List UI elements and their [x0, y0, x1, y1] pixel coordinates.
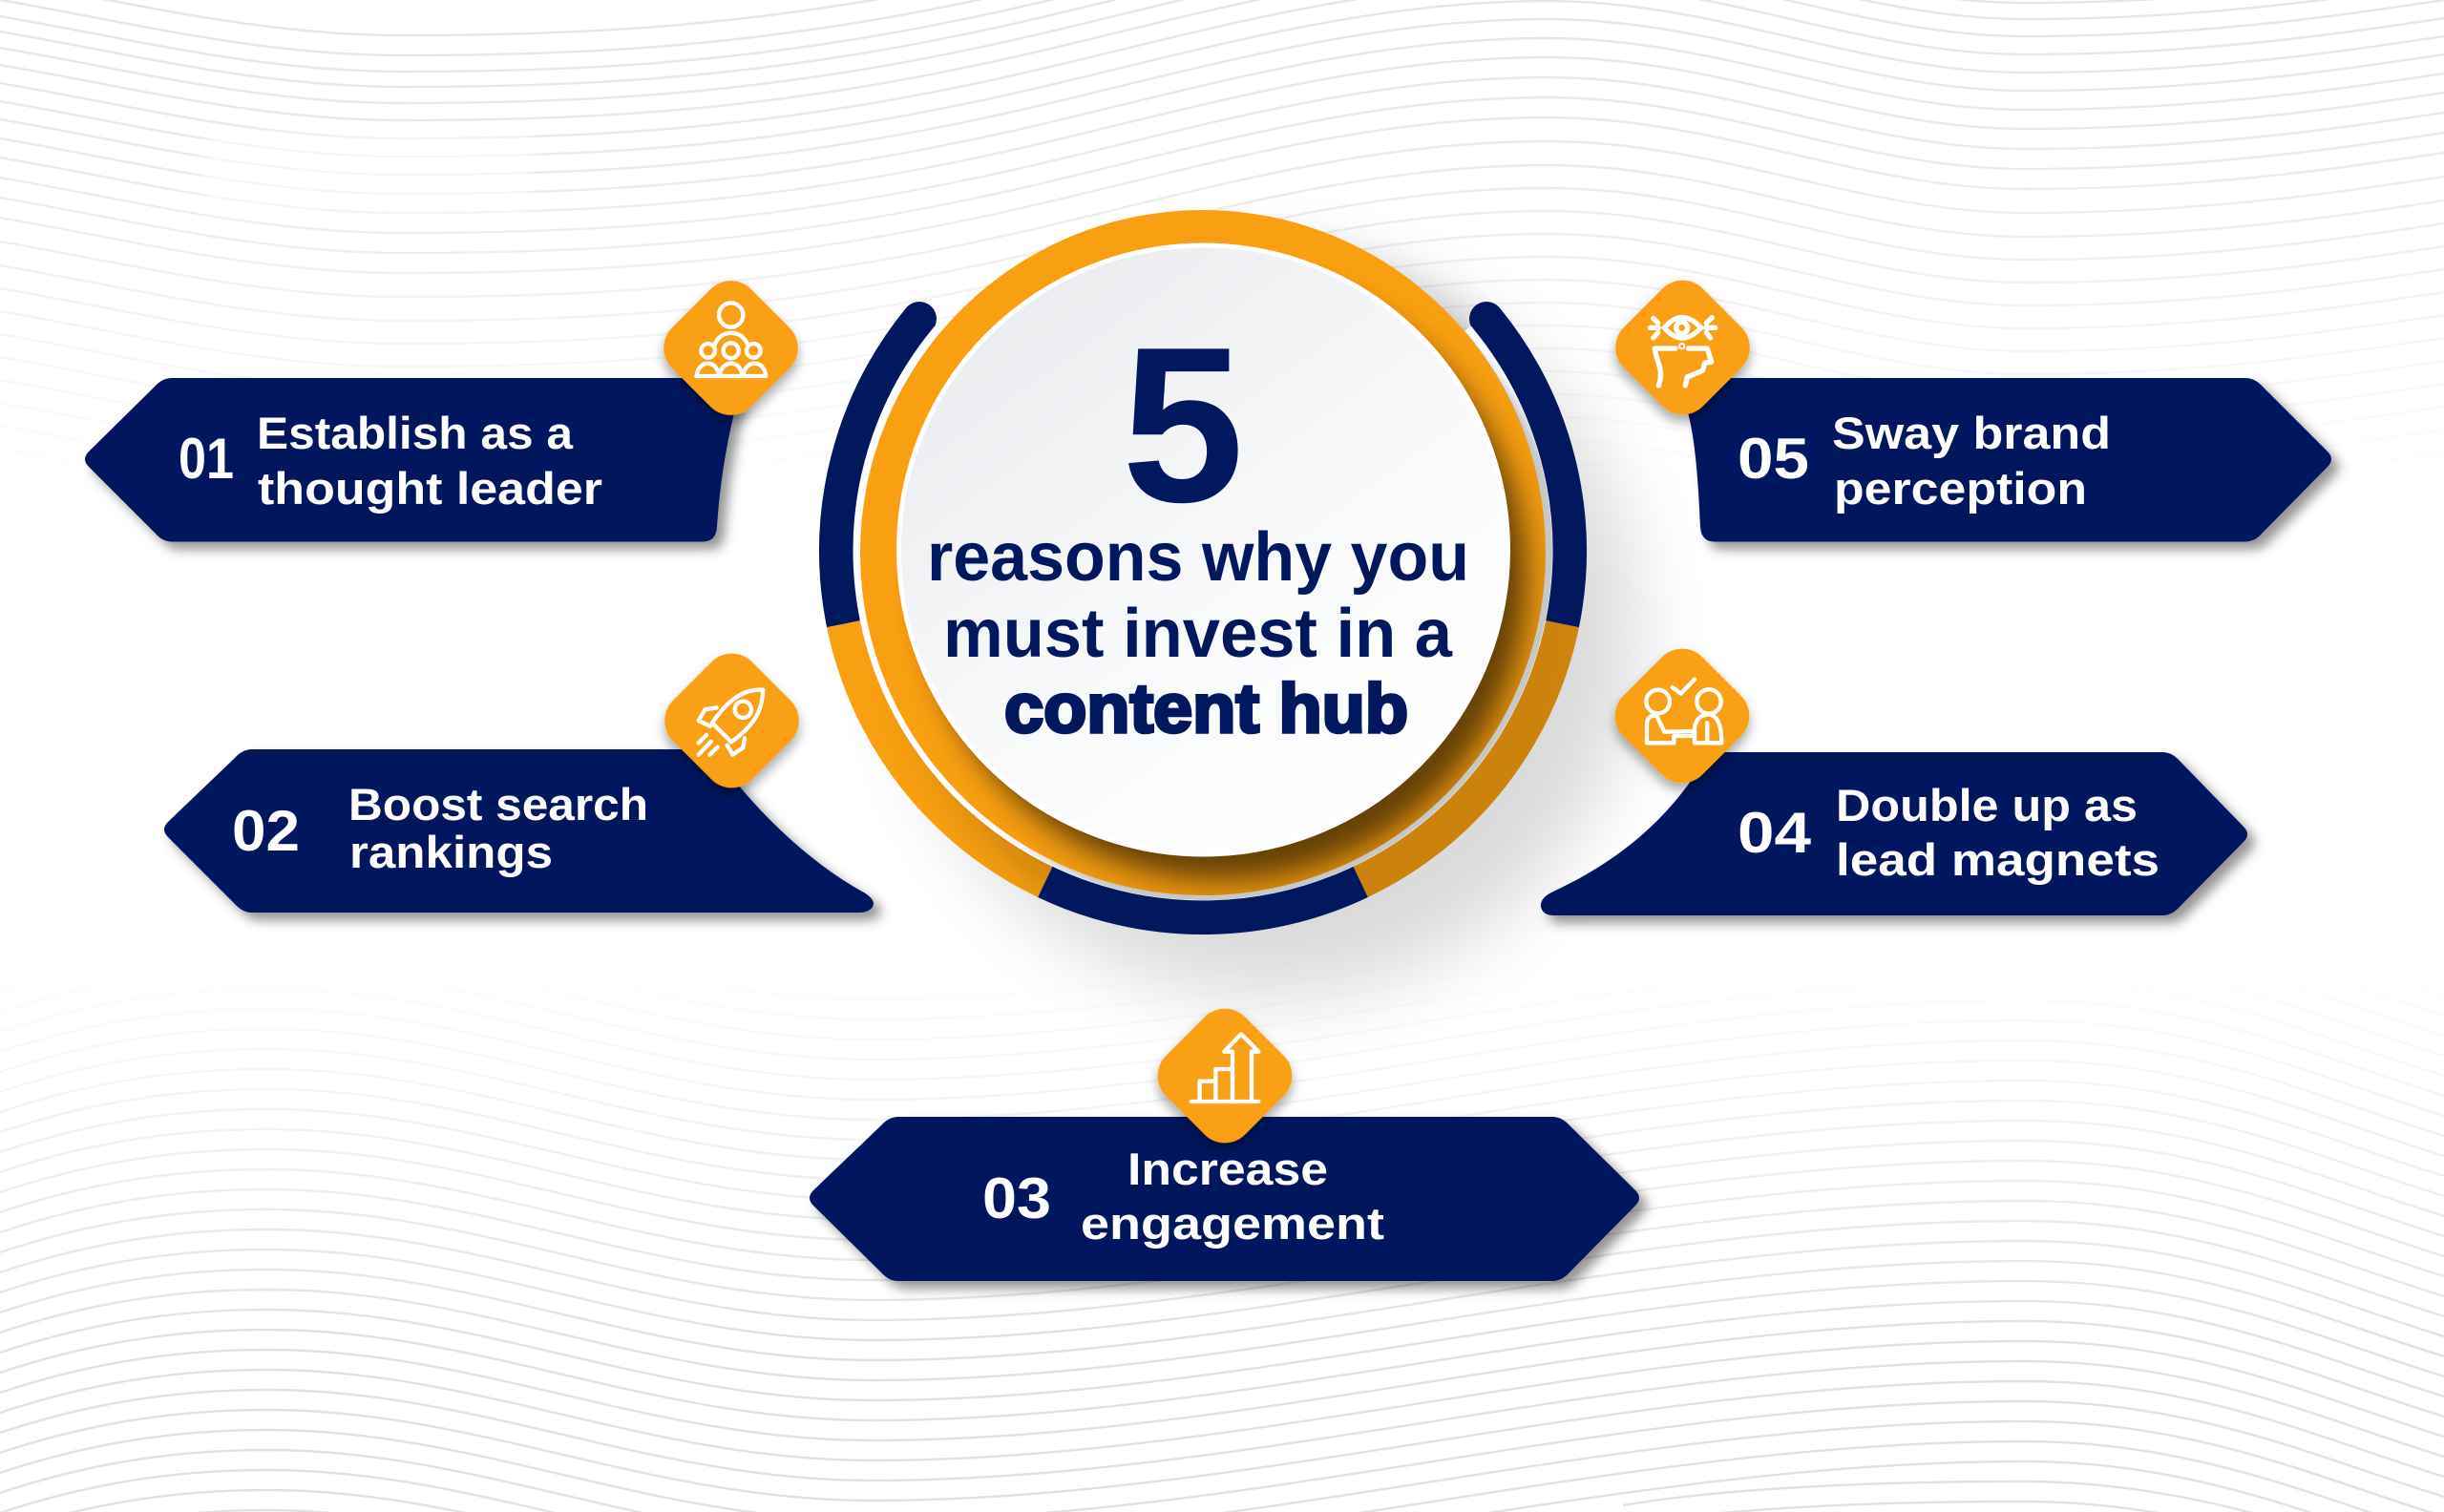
icon: growth chart badge	[1146, 997, 1304, 1155]
orange ring	[860, 210, 1546, 895]
banner 01: thought leader	[258, 463, 602, 514]
banner 04: lead magnets	[1836, 834, 2160, 885]
white disc	[899, 245, 1508, 854]
number: 04	[1738, 801, 1812, 865]
banner shape	[1675, 378, 2331, 542]
banner shape	[1541, 752, 2247, 915]
banner 01	[85, 378, 744, 542]
icon: rocket badge	[653, 641, 811, 800]
number: 05	[1738, 427, 1809, 491]
number: 02	[232, 799, 300, 863]
title line 2: must invest in a	[943, 596, 1453, 672]
banner 05	[1675, 378, 2331, 542]
banner 02: rankings	[349, 827, 553, 877]
number: 01	[179, 427, 234, 491]
banner shape	[164, 749, 874, 913]
banner shape	[85, 378, 744, 542]
icon: group of people badge	[652, 269, 810, 427]
label: Establish as a	[257, 408, 574, 458]
banner 04	[1541, 752, 2247, 915]
label: Double up as	[1836, 780, 2138, 830]
central circle graphic	[836, 210, 1637, 998]
banner 03	[810, 1117, 1639, 1281]
banner 02	[164, 749, 874, 913]
title line 1: reasons why you	[927, 519, 1469, 596]
icon: head with eye badge	[1604, 268, 1761, 427]
label: Increase	[1127, 1144, 1328, 1194]
segmented outer ring	[844, 624, 1562, 882]
banner 05: perception	[1834, 463, 2087, 514]
title	[927, 302, 1469, 747]
label: Sway brand	[1832, 408, 2111, 458]
number: 03	[982, 1166, 1051, 1230]
banner shape	[810, 1117, 1639, 1281]
big number 5: 5	[1122, 302, 1244, 549]
banner 03: engagement	[1081, 1198, 1384, 1249]
title line 3: content hub	[1004, 671, 1408, 747]
label: Boost search	[348, 779, 648, 830]
icon: meeting handshake badge	[1603, 637, 1761, 795]
